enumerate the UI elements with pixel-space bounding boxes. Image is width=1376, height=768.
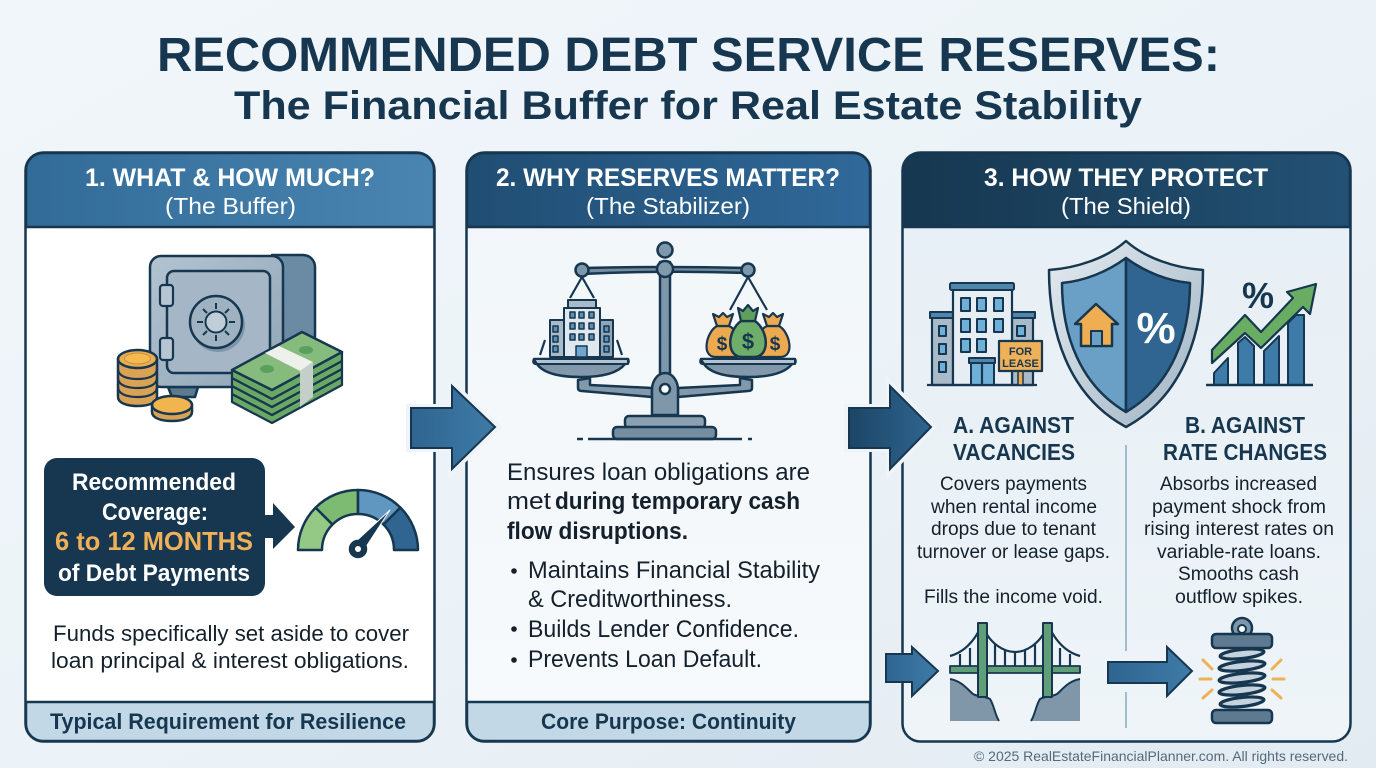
panel: why reserves matter — [466, 152, 870, 742]
panel 1 header — [26, 153, 434, 227]
text: loan obligations statement: flow disruptions. — [507, 518, 688, 545]
text: vacancies explanation: Covers payments — [940, 474, 1087, 495]
arrow: to spring — [1108, 647, 1192, 696]
panel 2 header: 2. WHY RESERVES MATTER? — [496, 164, 840, 192]
panel: what and how much — [26, 152, 434, 742]
list: benefits of reserves — [511, 557, 820, 673]
text: vacancies explanation — [917, 474, 1110, 608]
title — [157, 29, 1220, 128]
panel 2 footer — [467, 702, 870, 741]
icon: building for lease — [927, 283, 1042, 385]
panel 1 header: 1. WHAT & HOW MUCH? — [85, 164, 375, 192]
panel 3 header: 3. HOW THEY PROTECT — [984, 164, 1268, 192]
arrow: to bridge — [886, 647, 938, 696]
list: benefits of reserves: & Creditworthiness. — [528, 586, 732, 613]
icon: rising rate chart: % — [1242, 275, 1274, 316]
text: rate changes explanation: variable-rate loans. — [1157, 542, 1321, 563]
heading: against rate changes: B. AGAINST — [1185, 412, 1305, 438]
list: benefits of reserves: Builds Lender Confidence. — [528, 616, 799, 643]
icon: balance scale: $ — [770, 334, 781, 355]
text: rate changes explanation — [1144, 474, 1334, 608]
icon: balance scale: $ — [717, 334, 728, 355]
callout: recommended coverage — [44, 458, 265, 596]
text: rate changes explanation: payment shock from — [1152, 497, 1326, 518]
title: The Financial Buffer for Real Estate Stability — [234, 84, 1143, 128]
panel 1 footer: Typical Requirement for Resilience — [50, 709, 406, 734]
text: vacancies explanation: turnover or lease gaps. — [917, 542, 1110, 563]
text: loan obligations statement: Ensures loan obligations are — [507, 459, 810, 486]
icon: balance scale: $ — [742, 329, 754, 354]
heading: against vacancies: A. AGAINST — [953, 412, 1074, 438]
icon: compression spring — [1200, 618, 1284, 723]
arrow: panel 1 to panel 2 — [410, 385, 496, 470]
panel: how they protect — [886, 152, 1350, 742]
text: rate changes explanation: outflow spikes. — [1175, 587, 1303, 608]
text: rate changes explanation: Smooths cash — [1178, 564, 1299, 585]
heading: against rate changes: RATE CHANGES — [1163, 439, 1327, 465]
arrow: callout to gauge — [264, 503, 295, 549]
text: funds description: loan principal & interest obligations. — [51, 648, 409, 673]
callout: recommended coverage: of Debt Payments — [58, 560, 250, 587]
callout: recommended coverage: Recommended — [72, 469, 236, 496]
text: loan obligations statement: met — [507, 488, 551, 515]
text: rate changes explanation: Absorbs increased — [1160, 474, 1317, 495]
icon: balance scale — [533, 242, 796, 439]
heading: against rate changes — [1163, 412, 1327, 465]
panel 2 header — [467, 153, 870, 227]
text: vacancies explanation: Fills the income void. — [924, 587, 1103, 608]
heading: against vacancies: VACANCIES — [953, 439, 1075, 465]
heading: against vacancies — [953, 412, 1075, 465]
icon: bridge over gap — [950, 623, 1080, 721]
icon: shield — [1049, 241, 1203, 427]
text: funds description — [51, 621, 409, 673]
icon: shield: % — [1136, 304, 1176, 353]
list: benefits of reserves: Maintains Financial Stability — [528, 557, 820, 584]
text: rate changes explanation: rising interest rates on — [1144, 519, 1334, 540]
text: vacancies explanation: when rental income — [930, 497, 1097, 518]
title: RECOMMENDED DEBT SERVICE RESERVES: — [157, 29, 1220, 82]
text: loan obligations statement — [507, 459, 810, 545]
icon: rising rate chart — [1206, 275, 1316, 385]
list: benefits of reserves: Prevents Loan Default. — [528, 646, 762, 673]
text: funds description: Funds specifically set aside to cover — [53, 621, 409, 646]
panel 2 header: (The Stabilizer) — [586, 193, 750, 219]
icon: building for lease: FOR — [1009, 346, 1032, 358]
icon: building for lease: LEASE — [1002, 358, 1039, 370]
icon: gauge — [298, 490, 418, 557]
callout: recommended coverage: Coverage: — [102, 499, 208, 526]
panel 3 header: (The Shield) — [1061, 193, 1191, 219]
panel 2 footer: Core Purpose: Continuity — [541, 709, 797, 734]
text: loan obligations statement: during temporary cash — [555, 488, 800, 515]
arrow: panel 2 to panel 3 — [848, 385, 932, 470]
panel 3 header — [903, 153, 1350, 227]
panel 1 header: (The Buffer) — [165, 193, 296, 219]
copyright: © 2025 RealEstateFinancialPlanner.com. All rights reserved. — [974, 748, 1348, 764]
callout: recommended coverage: 6 to 12 MONTHS — [55, 526, 253, 556]
icon: safe with coins and cash — [118, 255, 342, 423]
text: vacancies explanation: drops due to tenant — [931, 519, 1097, 540]
panel 1 footer — [26, 702, 434, 741]
